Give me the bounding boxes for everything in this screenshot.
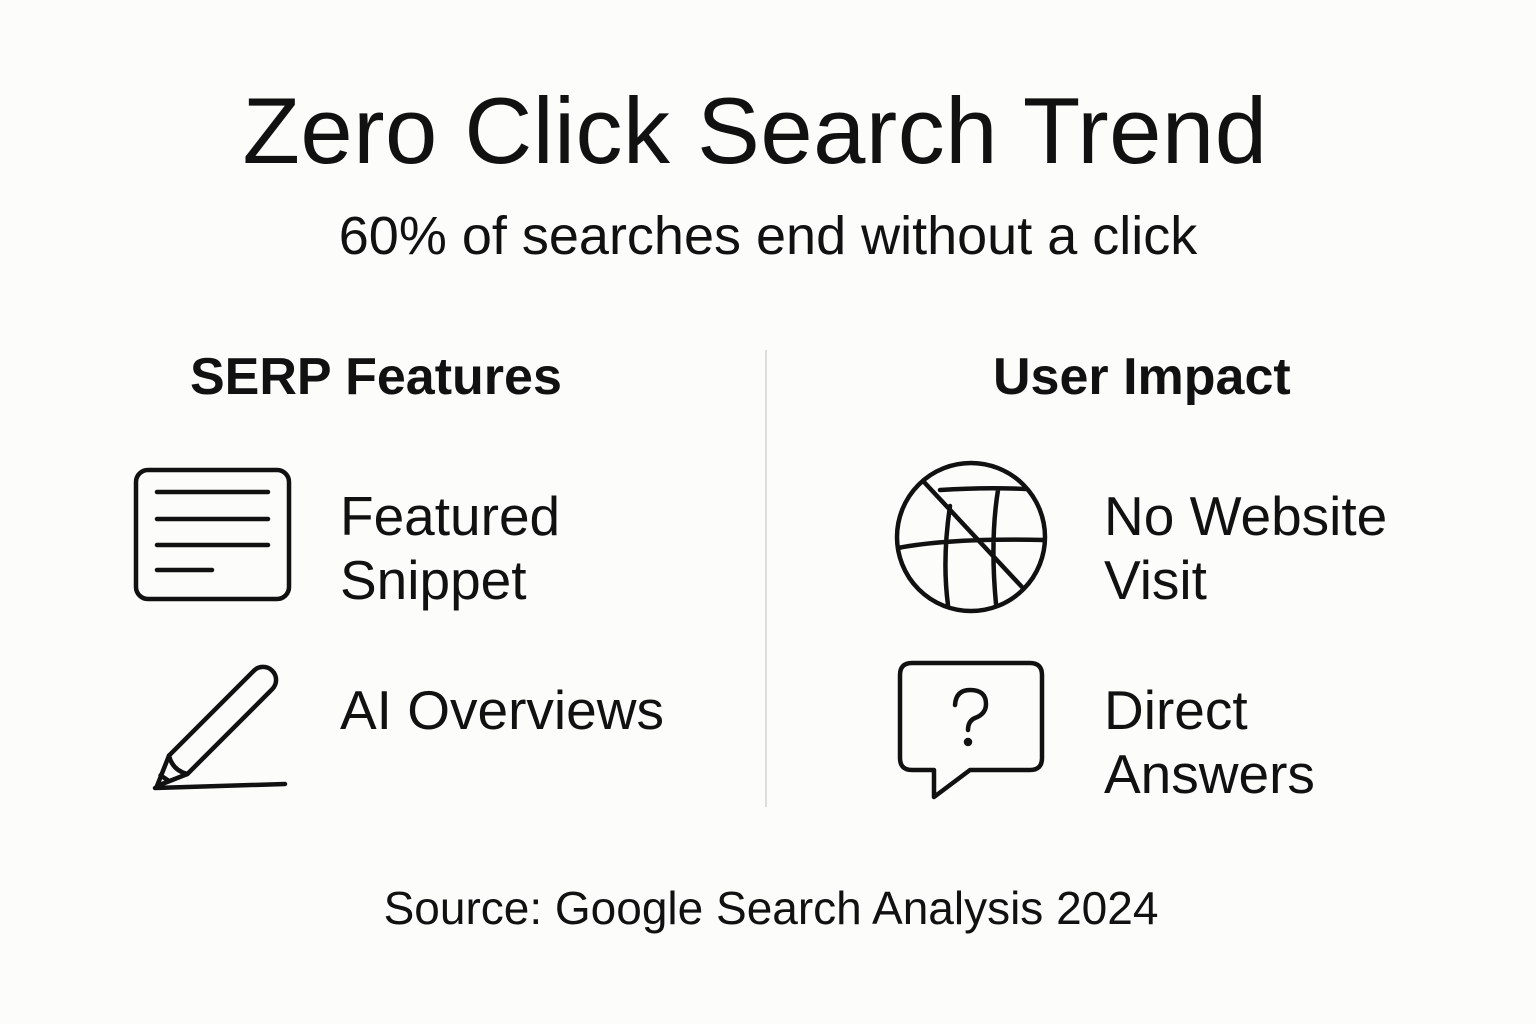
text: No Website Visit: No Website [1104,485,1387,547]
text: No Website Visit: Visit [1104,549,1207,611]
text: Featured Snippet: Featured [340,485,560,547]
subtitle: 60% of searches end without a click [339,206,1197,266]
text: Featured Snippet: Snippet [340,549,527,611]
icon: featured snippet card [136,470,289,599]
source: Source: Google Search Analysis 2024 [384,882,1158,934]
title: Zero Click Search Trend [242,78,1267,183]
text: AI Overviews: AI Overviews [340,679,664,741]
text: Direct Answers: Direct [1104,679,1248,741]
icon: question speech bubble [900,663,1042,797]
heading: User Impact: User Impact [993,348,1291,406]
divider [765,350,767,807]
text: Direct Answers [1104,679,1315,805]
icon: pencil [148,662,285,795]
text: Direct Answers: Answers [1104,743,1315,805]
text: Featured Snippet [340,485,560,611]
icon: crossed globe [897,463,1045,611]
heading: SERP Features: SERP Features [190,348,562,406]
text: No Website Visit [1104,485,1387,611]
